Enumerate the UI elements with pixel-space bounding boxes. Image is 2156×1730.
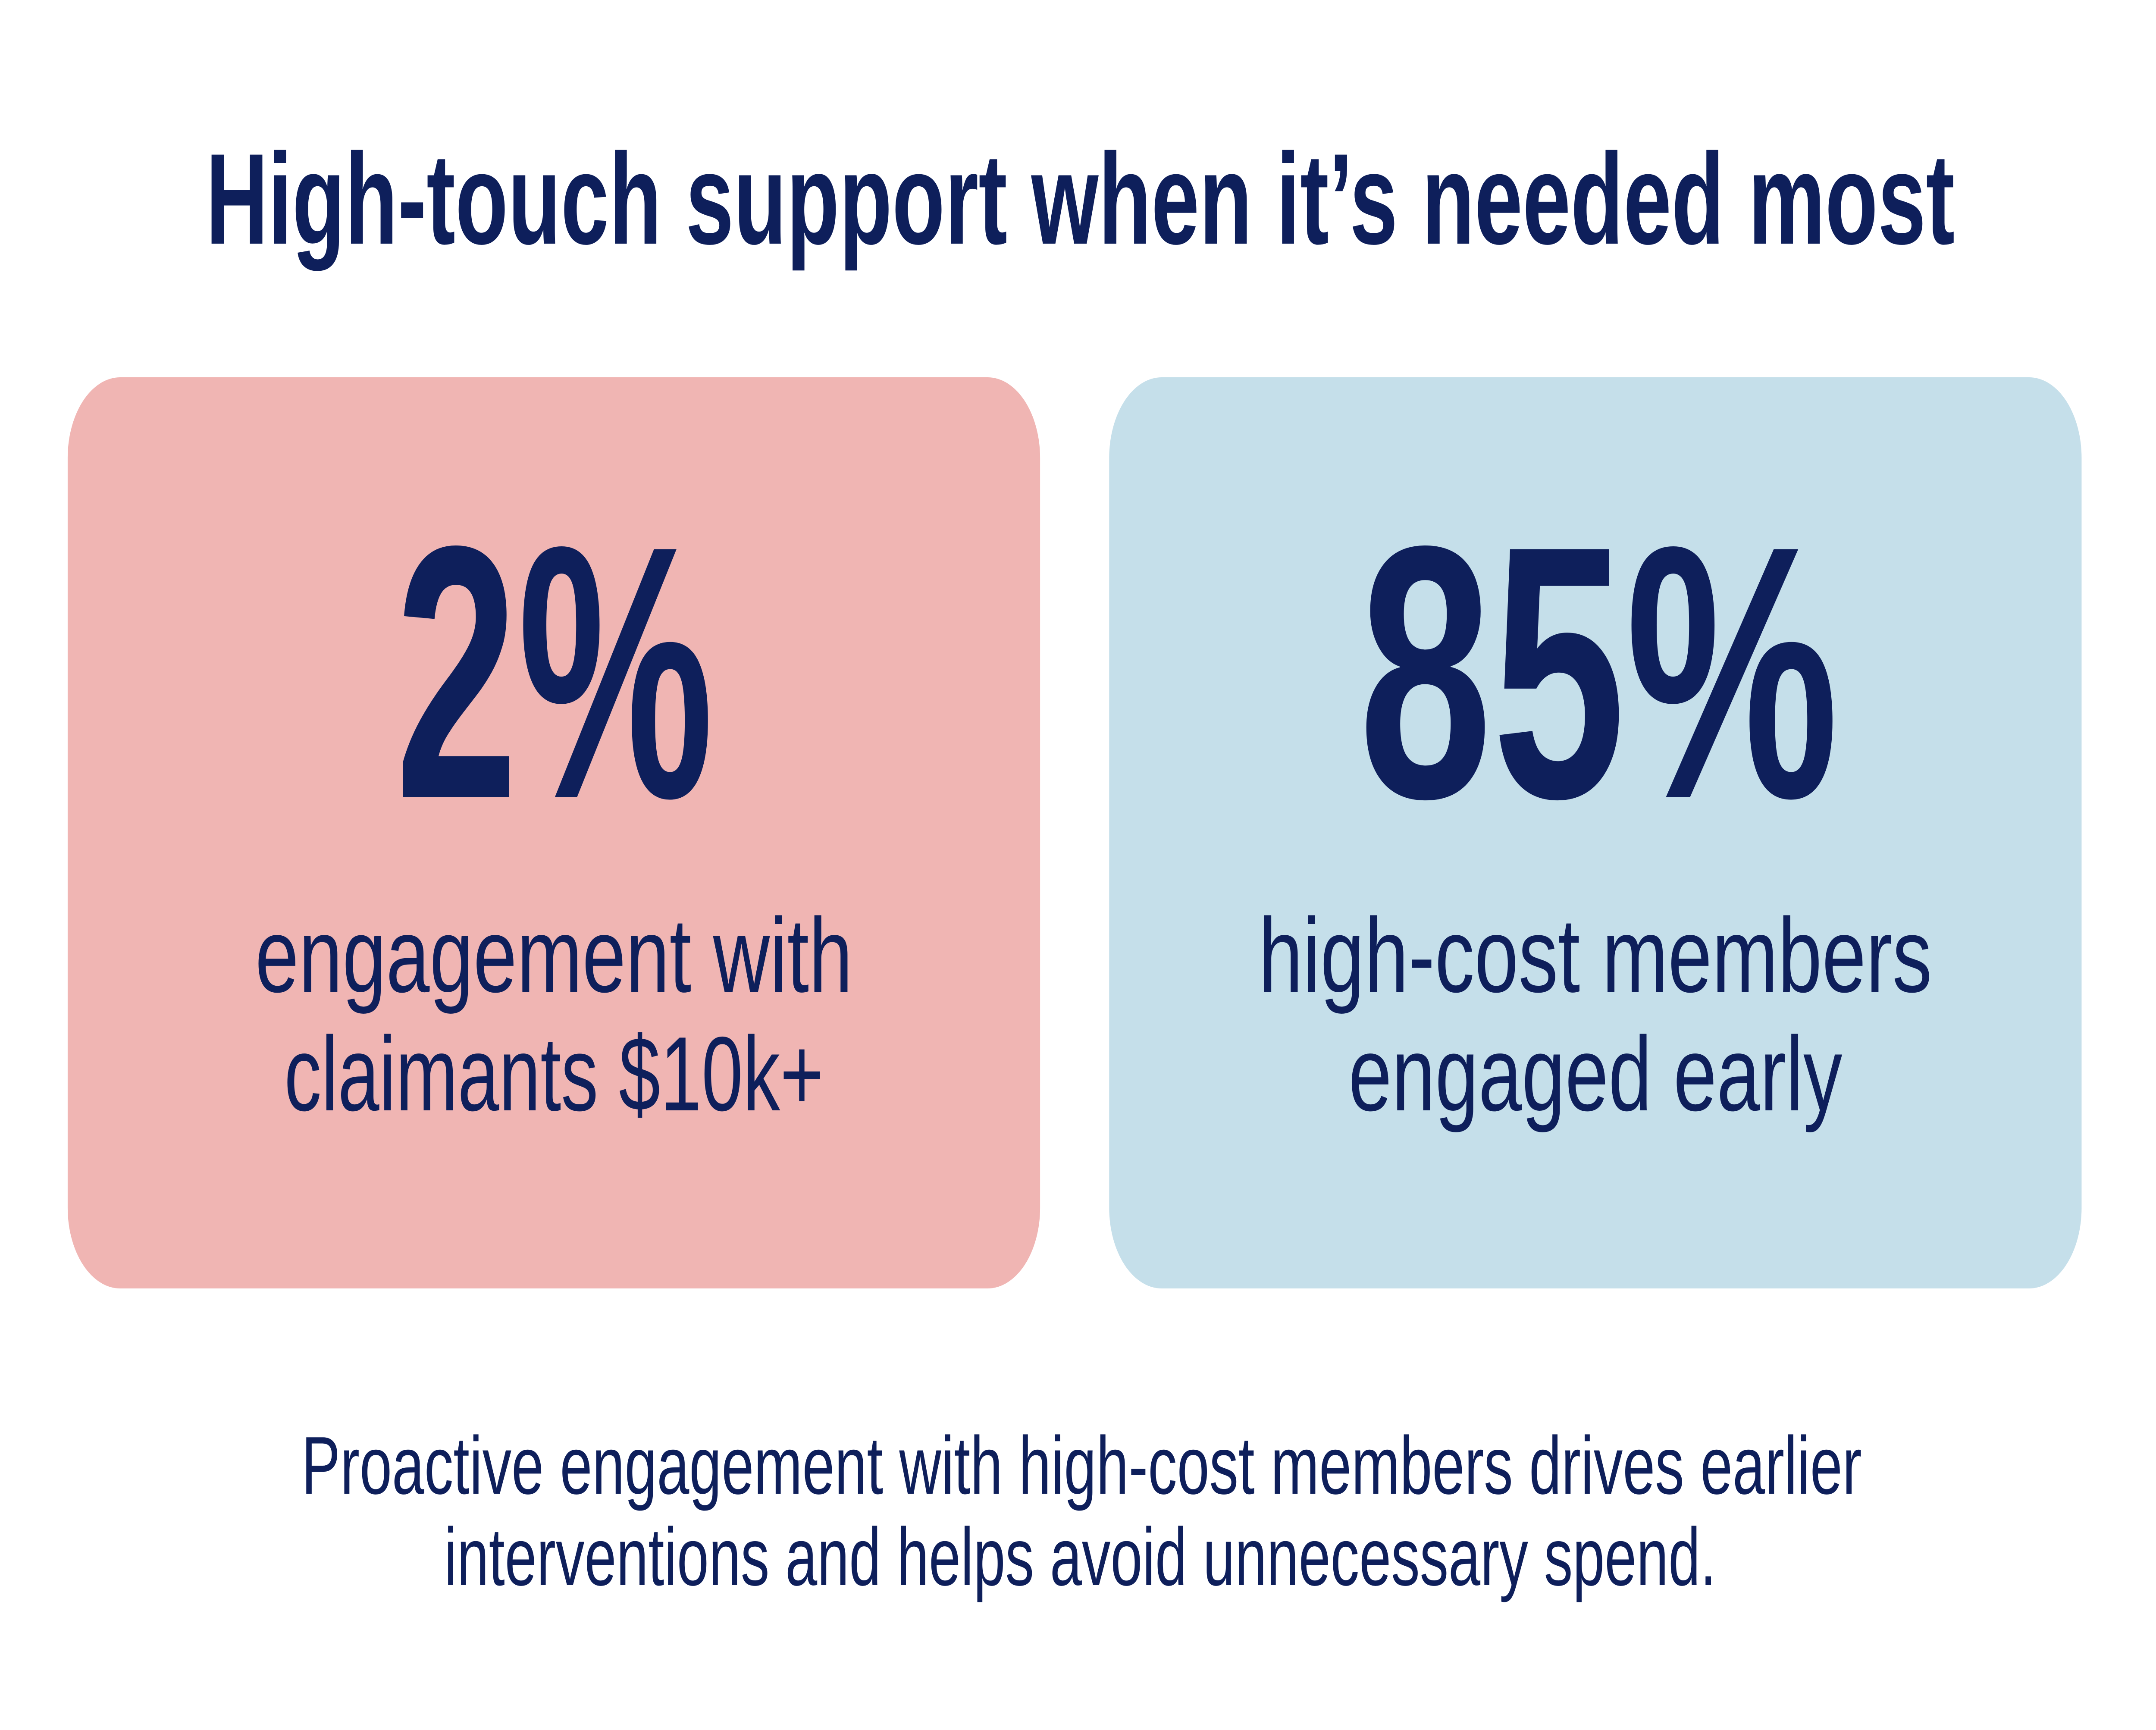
text: high-cost members engaged early: high-cost members <box>1259 896 1932 1014</box>
text: engagement with claimants <box>255 896 852 1133</box>
footer text: interventions and helps avoid unnecessary spend. <box>444 1511 1716 1602</box>
title: High-touch support when it’s needed most <box>206 127 1955 271</box>
panel: 85% high-cost members <box>1109 377 2081 1288</box>
text: high-cost members engaged early <box>1259 896 1932 1133</box>
stat: 85%: 85% <box>1359 471 1839 874</box>
text: engagement with claimants: claimants $10k+ <box>284 1015 824 1133</box>
footer text <box>301 1420 1862 1602</box>
stat: 2%: 2% <box>395 471 714 874</box>
text: engagement with claimants: engagement with <box>255 896 852 1014</box>
footer text: Proactive engagement with high-cost members drives earlier <box>301 1420 1862 1511</box>
text: high-cost members engaged early: engaged early <box>1348 1015 1842 1133</box>
panel: 2% engagement <box>68 377 1040 1288</box>
